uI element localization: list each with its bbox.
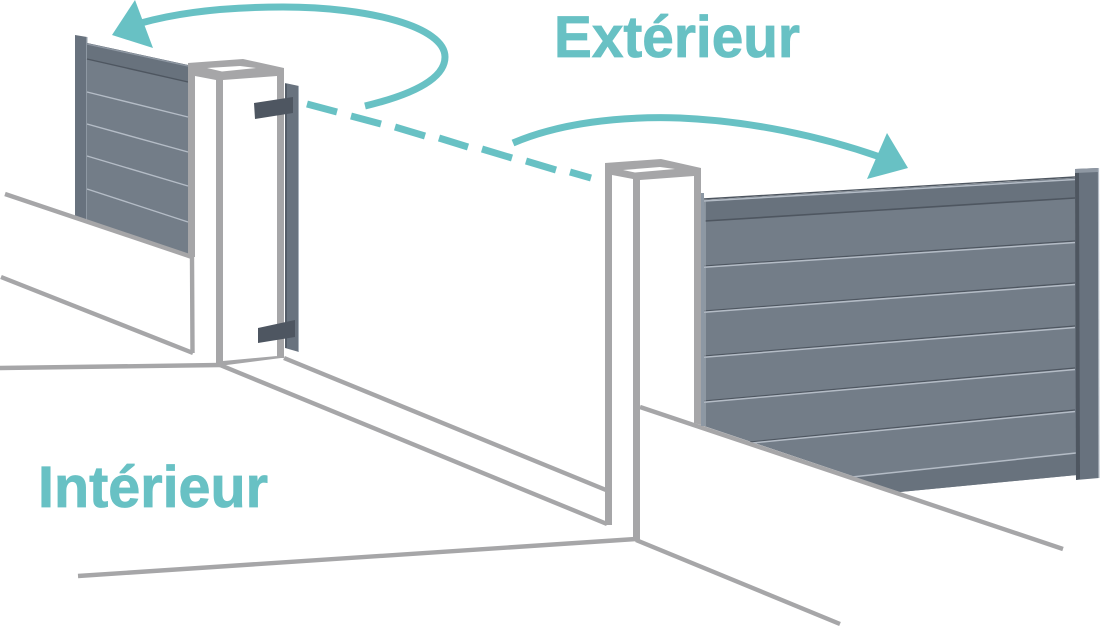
lower hinge <box>258 320 295 343</box>
right wall and ground lines <box>78 407 1063 624</box>
left fence panel <box>75 35 188 254</box>
left pillar <box>188 59 284 366</box>
left wall and ground lines <box>0 194 607 524</box>
right fence panel <box>704 177 1077 492</box>
label: Extérieur: Extérieur <box>554 5 800 70</box>
upper hinge <box>254 97 293 119</box>
right fence post <box>1075 168 1099 480</box>
label: Intérieur: Intérieur <box>38 455 268 520</box>
right pillar <box>605 159 702 540</box>
gate leaf folded against left post <box>285 83 299 352</box>
dashed line: gate swing axis <box>307 104 591 178</box>
arrow: left leaf opening outward <box>112 0 445 106</box>
arrow: right leaf opening outward <box>513 118 908 179</box>
